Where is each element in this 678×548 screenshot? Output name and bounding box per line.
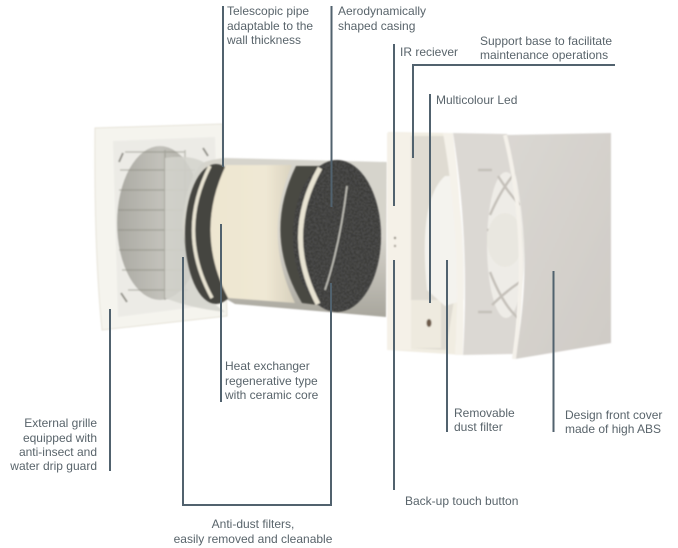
leader: touch button — [393, 260, 395, 490]
external grille — [95, 124, 227, 330]
leader: support base — [413, 65, 615, 158]
leader: front cover — [552, 271, 554, 432]
leader: IR receiver — [393, 44, 395, 206]
label: anti-dust filters: easily removed and cleanable — [174, 532, 333, 546]
label: telescopic pipe: Telescopic pipe — [227, 4, 309, 18]
telescopic pipe — [165, 157, 387, 317]
label: anti-dust filters: Anti-dust filters, — [212, 517, 294, 531]
label: external grille: water drip guard — [9, 459, 97, 473]
label: dust filter: dust filter — [454, 420, 503, 434]
leader: heat exchanger — [220, 224, 222, 402]
label: dust filter: Removable — [454, 406, 515, 420]
label: casing: Aerodynamically — [338, 4, 426, 18]
leader: casing — [330, 6, 332, 207]
leader: dust filter — [446, 260, 448, 432]
label: touch button: Back-up touch button — [405, 494, 518, 508]
label: heat exchanger: with ceramic core — [224, 388, 319, 402]
label: IR receiver: IR reciever — [400, 45, 458, 59]
label: external grille: External grille — [24, 416, 97, 430]
label: multicolour LED: Multicolour Led — [436, 93, 517, 107]
label: casing: shaped casing — [338, 19, 415, 33]
label: support base: Support base to facilitate — [480, 34, 612, 48]
label: front cover: Design front cover — [565, 408, 662, 422]
leader: external grille — [109, 309, 111, 471]
label: front cover: made of high ABS — [565, 422, 661, 436]
label: heat exchanger: Heat exchanger — [225, 359, 310, 373]
heat exchanger core with filters — [185, 160, 381, 312]
leader: telescopic pipe — [222, 6, 224, 167]
label: external grille: equipped with — [23, 431, 97, 445]
label: telescopic pipe: wall thickness — [226, 33, 301, 47]
product illustration — [95, 124, 611, 359]
label: heat exchanger: regenerative type — [225, 374, 318, 388]
label: telescopic pipe: adaptable to the — [227, 19, 313, 33]
label: external grille: anti-insect and — [19, 445, 97, 459]
support base — [387, 132, 464, 355]
bracket: anti-dust filters — [183, 257, 331, 505]
label: support base: maintenance operations — [480, 48, 608, 62]
removable dust filter casing — [453, 133, 525, 355]
leader: multicolour LED — [429, 94, 431, 303]
design front cover — [505, 133, 611, 359]
